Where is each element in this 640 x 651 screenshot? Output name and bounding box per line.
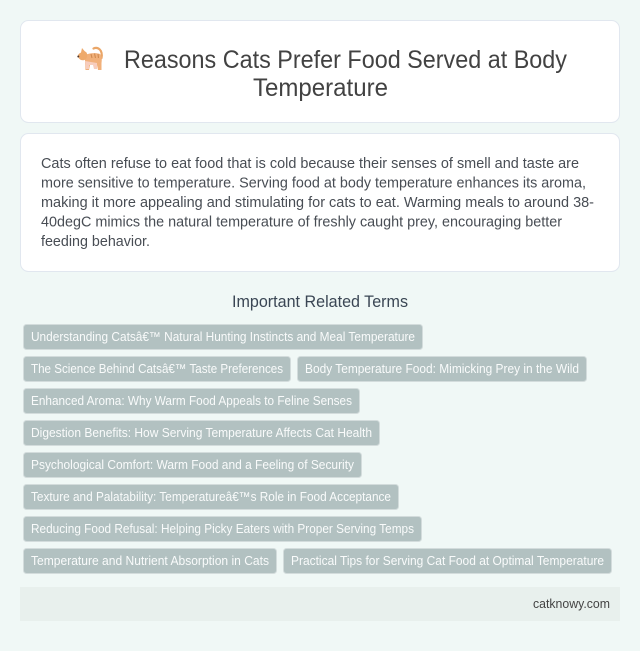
panel: intro paragraph	[20, 134, 620, 272]
tag: nutrient absorption: Temperature and Nutrient Absorption in Cats	[31, 554, 269, 568]
panel: title card	[20, 20, 620, 122]
tag: digestion benefits: Digestion Benefits: How Serving Temperature Affects Cat Health	[31, 426, 372, 440]
tag: texture and palatability: Texture and Palatability: Temperatureâ€™s Role in Food Acceptance	[31, 490, 391, 504]
tag: practical tips	[284, 548, 612, 574]
tag: mimicking prey: Body Temperature Food: Mimicking Prey in the Wild	[305, 362, 579, 376]
tag: taste preferences	[24, 356, 290, 382]
text block: explanation: 40degC mimics the natural temperature of freshly caught prey, encouraging better	[41, 214, 562, 230]
tag: taste preferences: The Science Behind Catsâ€™ Taste Preferences	[31, 362, 283, 376]
tag: practical tips: Practical Tips for Serving Cat Food at Optimal Temperature	[291, 554, 604, 568]
footer	[20, 587, 620, 621]
footer: catknowy.com	[533, 597, 610, 611]
tag: psychological comfort	[24, 452, 362, 478]
title: Reasons Cats Prefer Food Served at Body	[124, 47, 568, 74]
tag: hunting instincts	[24, 324, 422, 350]
tag: digestion benefits	[24, 420, 380, 446]
title	[124, 47, 568, 102]
tag: reducing food refusal	[24, 516, 422, 542]
text block: explanation: feeding behavior.	[41, 234, 150, 250]
panel: related term tags	[24, 324, 612, 574]
tag: hunting instincts: Understanding Catsâ€™ Natural Hunting Instincts and Meal Temperature	[31, 330, 415, 344]
title: Temperature	[253, 75, 388, 102]
heading: important related terms: Important Related Terms	[232, 293, 408, 311]
tag: nutrient absorption	[24, 548, 276, 574]
text block: explanation: Cats often refuse to eat food that is cold because their senses of smell and taste are	[41, 156, 579, 172]
text block: explanation	[41, 156, 594, 250]
tag: enhanced aroma: Enhanced Aroma: Why Warm Food Appeals to Feline Senses	[31, 394, 352, 408]
text block: explanation: more sensitive to temperature. Serving food at body temperature enhances its aroma,	[41, 176, 586, 192]
icon: cat	[77, 48, 102, 70]
tag: enhanced aroma	[24, 388, 360, 414]
tag: psychological comfort: Psychological Comfort: Warm Food and a Feeling of Security	[31, 458, 355, 472]
tag: mimicking prey	[298, 356, 586, 382]
tag: reducing food refusal: Reducing Food Refusal: Helping Picky Eaters with Proper Serving Temps	[31, 522, 414, 536]
text block: explanation: making it more appealing and stimulating for cats to eat. Warming meals to around 38-	[41, 195, 594, 211]
tag: texture and palatability	[24, 484, 398, 510]
